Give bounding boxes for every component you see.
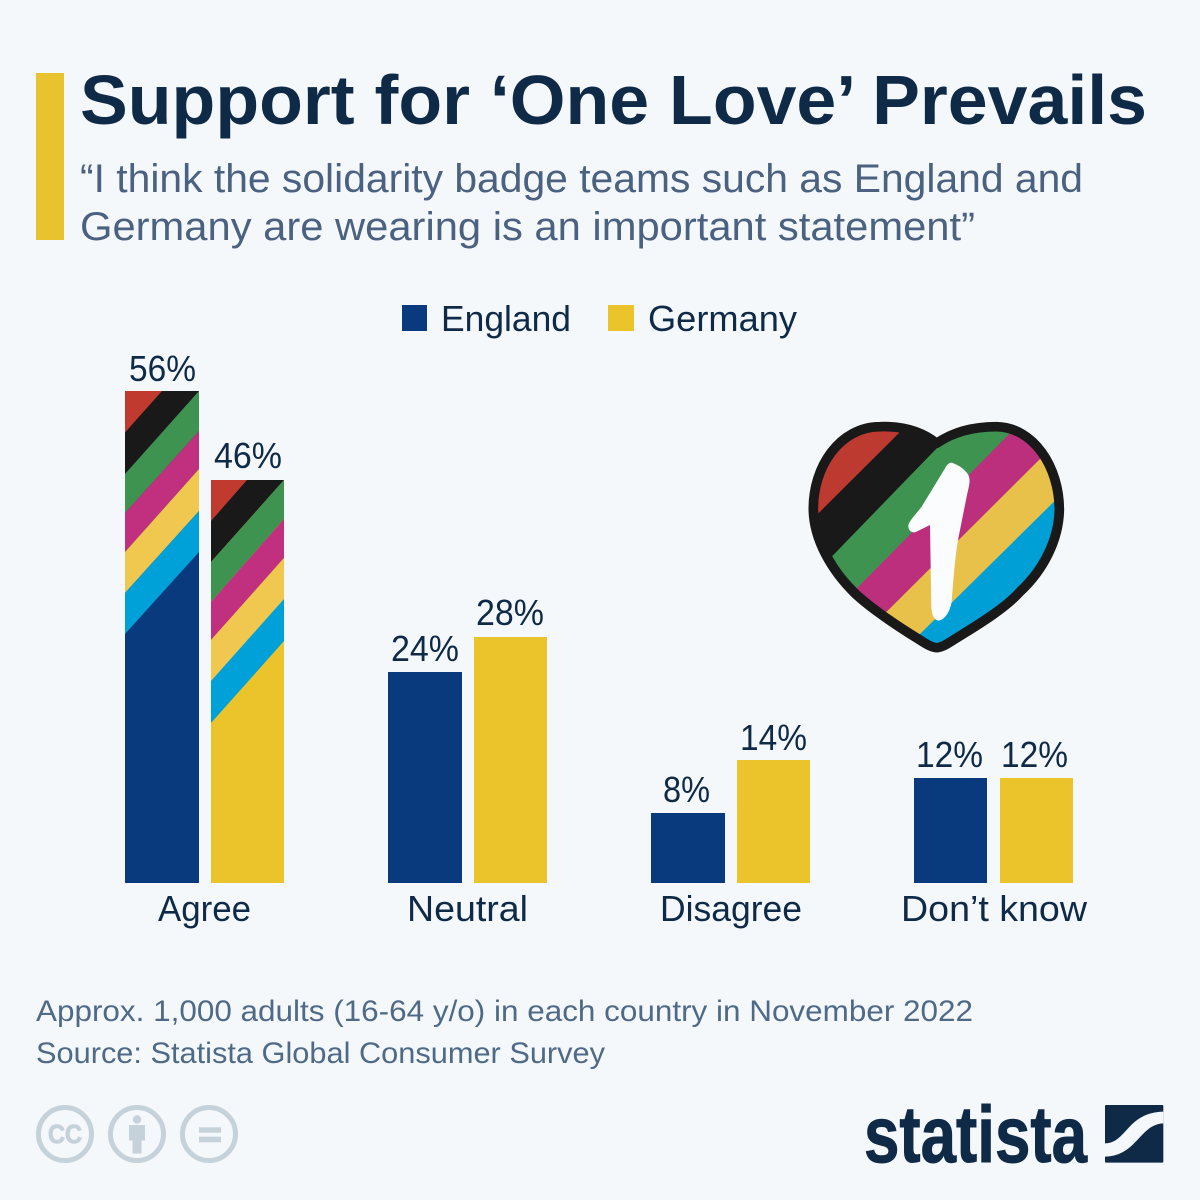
bar: Germany Disagree [737, 760, 810, 883]
value: 14%: 14% [740, 717, 807, 758]
value: 56%: 56% [129, 348, 196, 389]
value: 24%: 24% [391, 628, 459, 669]
subtitle: “I think the solidarity badge teams such as England and [80, 157, 1083, 201]
legend: Germany [648, 298, 797, 339]
bar group: Agree [125, 348, 284, 929]
category label: Don't know: Don’t know [901, 888, 1088, 929]
subtitle: Germany are wearing is an important statement” [80, 205, 975, 249]
subtitle [80, 157, 1083, 249]
legend [402, 298, 797, 339]
bar: England Don't know [914, 778, 987, 883]
bar: Germany Don't know [1000, 778, 1073, 883]
logo mark [1105, 1105, 1163, 1163]
category label: Neutral: Neutral [407, 888, 528, 929]
bar: England Disagree [651, 813, 725, 883]
bar: England Agree 56% with rainbow stripes [125, 391, 199, 883]
value: 46%: 46% [214, 435, 282, 476]
icon: CC: CC [48, 1119, 82, 1149]
bar chart [125, 348, 1088, 929]
icon: One Love heart badge [808, 422, 1064, 652]
bar group: Disagree [651, 717, 810, 929]
category label: Agree: Agree [158, 888, 251, 929]
bar: England Neutral [388, 672, 462, 883]
accent bar [36, 73, 64, 240]
value: 28%: 28% [476, 592, 544, 633]
legend: England [441, 298, 571, 339]
footnote: Approx. 1,000 adults (16-64 y/o) in each country in November 2022 [36, 995, 973, 1028]
footnote: Source: Statista Global Consumer Survey [36, 1037, 605, 1070]
icon: attribution person [110, 1108, 164, 1160]
logo wordmark: statista [864, 1090, 1087, 1179]
bar: Germany Agree 46% with rainbow stripes [211, 480, 284, 883]
icon: CC [38, 1108, 92, 1160]
value: 8%: 8% [663, 769, 710, 810]
logo: Statista [864, 1090, 1163, 1179]
value: 12% Germany: 12% [1001, 734, 1068, 775]
icon: creative commons licence badges [38, 1108, 236, 1160]
icon: no derivatives equals [182, 1108, 236, 1160]
category label: Disagree: Disagree [660, 888, 802, 929]
value: 12% England: 12% [916, 734, 983, 775]
bar: Germany Neutral [474, 637, 547, 883]
title: Support for ‘One Love’ Prevails [80, 61, 1147, 139]
bar group: Neutral [388, 592, 547, 929]
bar group: Don't know [901, 734, 1088, 929]
footnote [36, 995, 973, 1070]
